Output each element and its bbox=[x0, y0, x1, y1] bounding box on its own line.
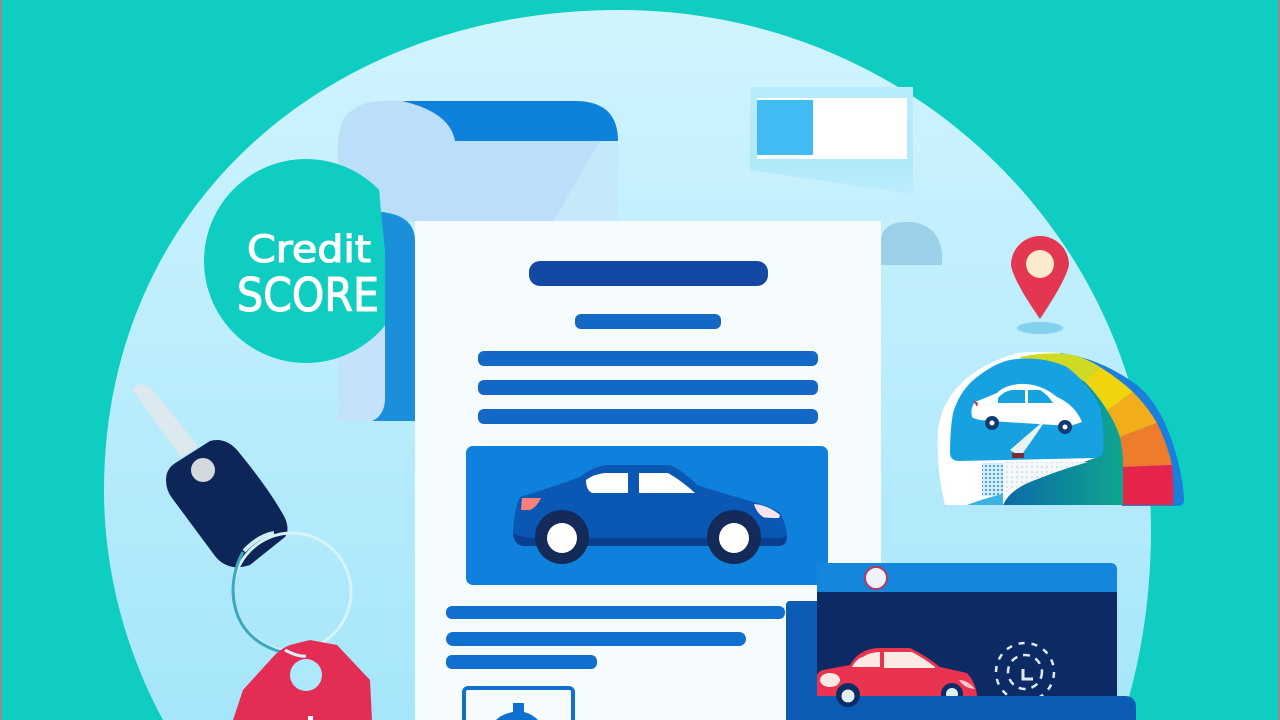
text lines top bbox=[478, 351, 818, 424]
icon: dashed clock bbox=[996, 643, 1054, 701]
shadow card bbox=[750, 87, 913, 194]
pin shadow bbox=[1017, 322, 1063, 334]
screen circle button bbox=[865, 567, 887, 589]
gauge dial bbox=[950, 359, 1104, 461]
credit score text: Credit bbox=[247, 228, 371, 271]
page curl bbox=[880, 222, 942, 265]
rolled paper behind document bbox=[338, 101, 618, 421]
icon: dollar box bbox=[464, 688, 573, 720]
document subtitle bar bbox=[575, 314, 721, 329]
gauge colour bands bbox=[1020, 353, 1173, 505]
icon: white car on gauge bbox=[971, 384, 1082, 434]
scroll blue strip bbox=[372, 212, 415, 421]
screen back panel bbox=[786, 601, 846, 720]
credit score text: SCORE bbox=[237, 268, 379, 322]
gauge road base bbox=[1003, 360, 1123, 505]
screen top bar bbox=[817, 563, 1117, 592]
gauge needle bbox=[1010, 418, 1047, 458]
car screen panel bbox=[786, 563, 1136, 720]
gauge outline bbox=[938, 352, 1100, 505]
credit score badge bbox=[204, 159, 415, 421]
text lines bottom bbox=[446, 606, 785, 669]
icon: car key bbox=[133, 384, 372, 720]
icon: red car bbox=[817, 648, 977, 705]
icon: blue car bbox=[513, 465, 787, 564]
red tag bbox=[233, 640, 372, 720]
red car rear wheel bbox=[836, 683, 860, 707]
key ring bbox=[233, 533, 351, 651]
document title bar bbox=[529, 261, 768, 286]
car image panel bbox=[466, 446, 828, 585]
key blade bbox=[133, 384, 198, 458]
gauge bbox=[938, 352, 1184, 506]
icon: location pin bbox=[1011, 236, 1069, 334]
key fob bbox=[166, 440, 288, 567]
screen display bbox=[817, 592, 1117, 702]
screen bottom bar bbox=[786, 696, 1136, 720]
gauge road bbox=[945, 457, 1098, 505]
document bbox=[415, 221, 881, 720]
